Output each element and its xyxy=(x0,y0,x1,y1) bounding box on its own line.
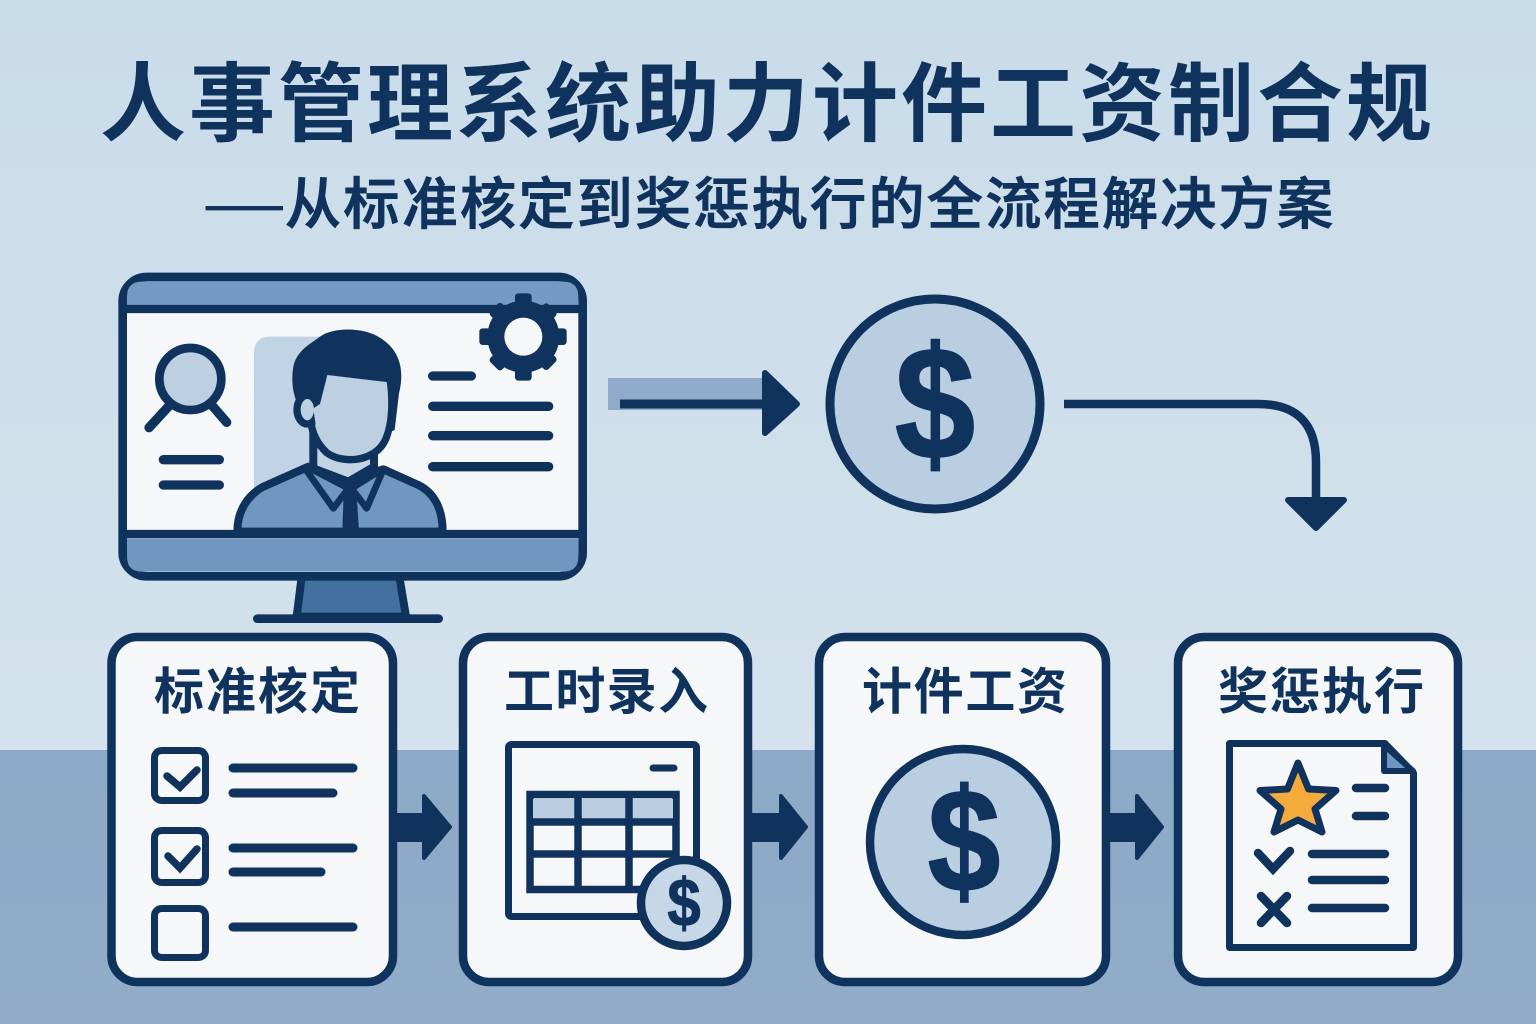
tie xyxy=(342,483,359,532)
icon: check and cross with lines xyxy=(1258,788,1385,923)
monitor body xyxy=(123,277,583,576)
panel: time entry xyxy=(463,637,748,982)
ear xyxy=(297,395,318,424)
left collar xyxy=(307,468,348,508)
hair xyxy=(292,330,401,433)
checklist xyxy=(154,750,353,958)
top divider xyxy=(123,296,582,321)
person shoulders xyxy=(237,467,443,532)
subtitle dash: — xyxy=(201,159,288,240)
arrow: curved down xyxy=(1064,404,1344,528)
page fold xyxy=(1384,745,1413,771)
subtitle xyxy=(201,159,1333,241)
heading: 工时录入 xyxy=(504,652,708,724)
dollar coin xyxy=(870,749,1056,935)
heading: 计件工资 xyxy=(862,652,1067,724)
icon: gear xyxy=(479,293,567,381)
small dollar coin: $ xyxy=(667,864,701,941)
icon: star xyxy=(1260,763,1336,832)
icon: monitor with employee profile xyxy=(123,277,583,619)
face xyxy=(311,372,391,460)
top bar xyxy=(127,282,578,305)
title: 人事管理系统助力计件工资制合规 xyxy=(100,34,1432,159)
panel: piece-rate wage xyxy=(819,637,1106,982)
lower screen divider xyxy=(123,521,582,546)
document xyxy=(1230,744,1414,948)
arrow: monitor to salary xyxy=(608,373,797,433)
heading: 标准核定 xyxy=(154,652,360,724)
timesheet table xyxy=(530,794,676,890)
background upper xyxy=(0,0,1536,750)
face patch over ear seam xyxy=(313,375,388,455)
arrow: step 1 to 2 xyxy=(395,796,450,858)
timesheet document xyxy=(508,744,696,916)
right text lines xyxy=(433,376,549,467)
panel: rewards and penalties xyxy=(1178,637,1458,982)
monitor stand xyxy=(297,577,406,617)
right collar xyxy=(352,472,382,508)
portrait backdrop xyxy=(254,337,353,490)
small dollar coin xyxy=(641,860,727,946)
person neck xyxy=(313,430,374,482)
dollar coin: $ xyxy=(928,760,1000,923)
doc mark xyxy=(653,764,674,772)
background lower band xyxy=(0,750,1536,1024)
icon: avatar search xyxy=(149,348,227,428)
icon: large dollar coin: $ xyxy=(895,314,975,493)
arrow: step 2 to 3 xyxy=(750,796,806,858)
panel: standard setting xyxy=(112,637,393,982)
arrow: step 3 to 4 xyxy=(1108,796,1162,858)
monitor base xyxy=(257,606,439,632)
icon: large dollar coin xyxy=(830,299,1040,509)
bottom bar xyxy=(127,538,578,572)
heading: 奖惩执行 xyxy=(1218,652,1424,724)
subtitle text: 从标准核定到奖惩执行的全流程解决方案 xyxy=(285,160,1333,241)
left text lines xyxy=(163,460,219,485)
